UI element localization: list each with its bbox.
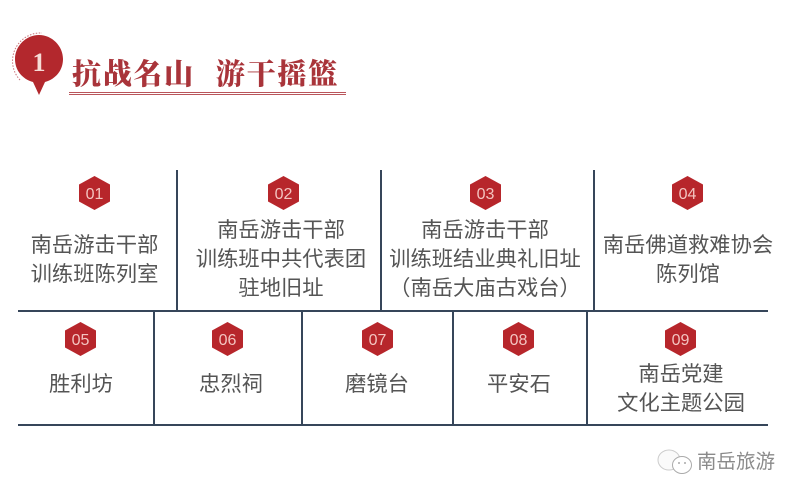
title underline <box>69 92 346 95</box>
hexagon number badges: 02 <box>275 186 292 203</box>
item 02 label: 驻地旧址 <box>238 276 324 300</box>
hexagon number badges: 03 <box>477 186 494 203</box>
item 04 label: 南岳佛道救难协会 <box>603 233 773 257</box>
hexagon number badges: 08 <box>510 332 528 349</box>
icon: numbered red pin <box>12 32 63 95</box>
item 04 label: 陈列馆 <box>656 262 720 286</box>
icon: numbered red pin: 1 <box>32 48 46 77</box>
item 01 label: 训练班陈列室 <box>31 262 158 286</box>
item 09 label: 南岳党建 <box>638 362 724 386</box>
item 03 label: 南岳游击干部 <box>421 218 549 242</box>
item 02 label <box>196 218 366 300</box>
item 04 label <box>603 233 773 286</box>
hexagon number badges: 04 <box>679 186 696 203</box>
section header <box>12 32 346 95</box>
watermark <box>658 450 775 474</box>
item 05 label: 胜利坊 <box>49 372 113 396</box>
hexagon number badges: 09 <box>672 332 690 349</box>
item 01 label <box>31 233 158 286</box>
item 07 label: 磨镜台 <box>345 372 409 396</box>
grid table <box>18 170 768 426</box>
title: 抗战名山 <box>72 59 195 91</box>
watermark text: 南岳旅游 <box>697 451 775 473</box>
item 09 label: 文化主题公园 <box>617 391 745 415</box>
item 02 label: 南岳游击干部 <box>217 218 345 242</box>
item 02 label: 训练班中共代表团 <box>196 247 366 271</box>
item 03 label <box>389 218 581 300</box>
item 08 label: 平安石 <box>487 372 551 396</box>
hexagon number badges: 06 <box>219 332 236 349</box>
item 03 label: （南岳大庙古戏台） <box>389 276 581 300</box>
item 09 label <box>617 362 745 415</box>
hexagon number badges: 01 <box>86 186 104 203</box>
icon: chat bubbles <box>658 450 692 474</box>
title: 游干摇篮 <box>216 59 339 91</box>
hexagon number badges: 05 <box>72 332 90 349</box>
hexagon number badges: 07 <box>369 332 386 349</box>
item 03 label: 训练班结业典礼旧址 <box>389 247 581 271</box>
title <box>72 58 339 91</box>
item 06 label: 忠烈祠 <box>199 372 263 396</box>
item 01 label: 南岳游击干部 <box>31 233 158 257</box>
